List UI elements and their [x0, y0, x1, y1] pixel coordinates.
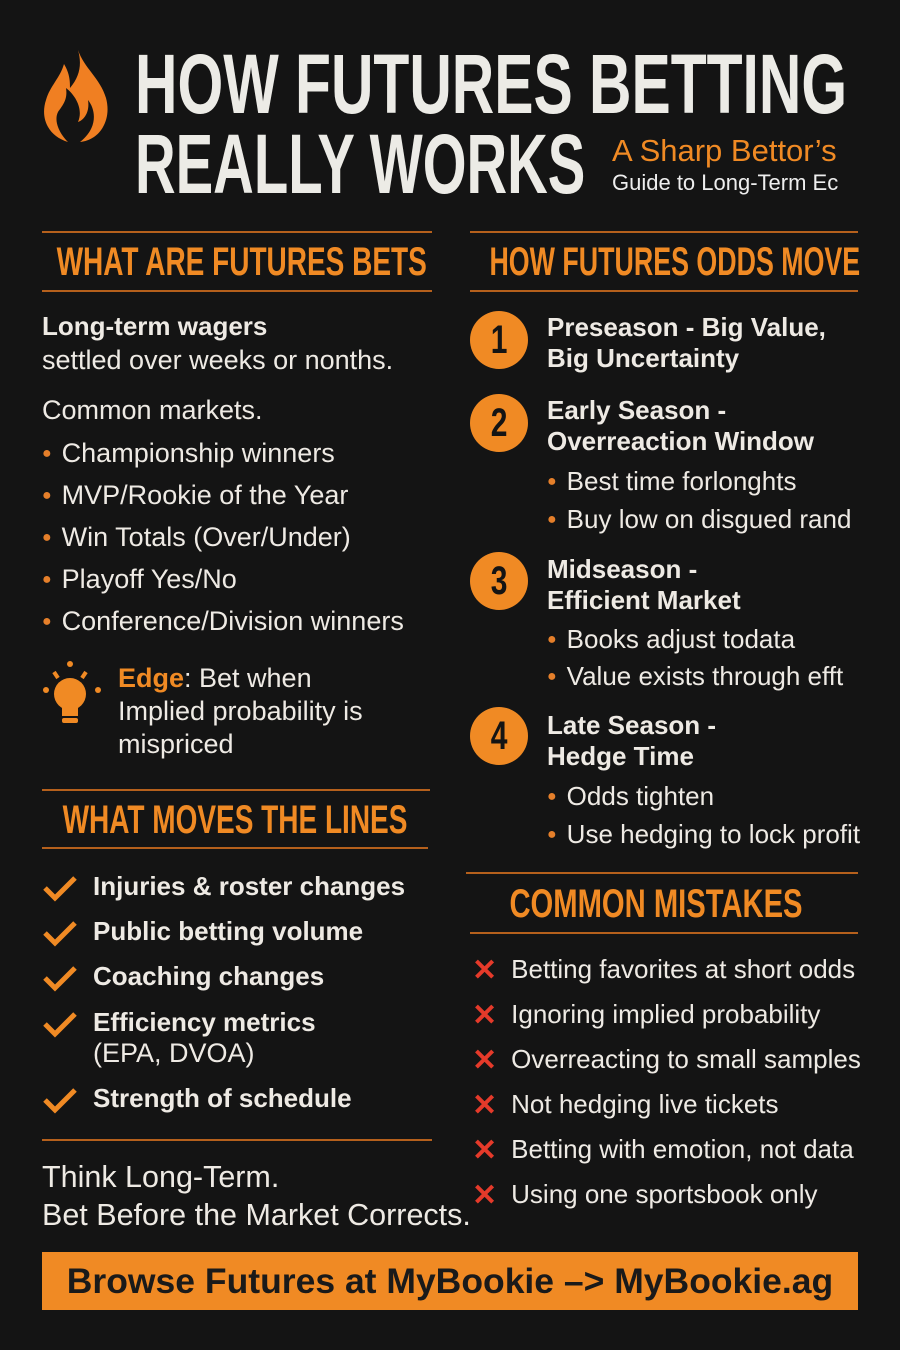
panel: odds stages: Overreaction Window	[547, 426, 814, 456]
subtitle: A Sharp Bettor’s	[612, 133, 837, 168]
list: common mistakes: ✕ Overreacting to small samples	[472, 1044, 861, 1077]
panel: odds stages: ● Buy low on disgued rand	[547, 504, 851, 534]
panel: odds stages: 2	[491, 401, 507, 445]
panel: odds stages: Late Season -	[547, 710, 716, 740]
callout: edge: mispriced	[118, 729, 234, 759]
title	[135, 37, 847, 211]
panel: odds stages: Midseason -	[547, 554, 697, 584]
tagline: Bet Before the Market Corrects.	[42, 1198, 471, 1232]
heading: what are futures bets: WHAT ARE FUTURES BETS	[57, 240, 427, 284]
panel: what are futures bets: ● Playoff Yes/No	[42, 564, 237, 594]
panel: odds stages: Hedge Time	[547, 741, 694, 771]
title: HOW FUTURES BETTING	[135, 37, 847, 131]
callout: edge: Implied probability is	[118, 696, 363, 726]
tagline: Think Long-Term.	[42, 1160, 279, 1194]
cta banner: Browse Futures at MyBookie –> MyBookie.ag	[67, 1261, 833, 1301]
list: common mistakes: ✕ Not hedging live tickets	[472, 1089, 779, 1122]
list: common mistakes: ✕ Betting favorites at short odds	[472, 954, 855, 987]
callout: edge: Edge: Bet when	[118, 663, 312, 693]
icon: lightbulb	[43, 661, 101, 723]
subtitle	[612, 133, 838, 195]
panel: odds stages: ● Use hedging to lock profit	[547, 819, 860, 849]
list: what moves the lines: (EPA, DVOA)	[93, 1038, 255, 1068]
list: what moves the lines: Strength of schedule	[93, 1083, 352, 1113]
list: what moves the lines	[43, 871, 405, 1114]
panel: odds stages: ● Best time forlonghts	[547, 466, 796, 496]
cta banner	[42, 1252, 858, 1310]
panel: odds stages: 3	[491, 559, 507, 603]
list: what moves the lines: Injuries & roster changes	[93, 871, 405, 901]
list: common mistakes	[472, 954, 861, 1212]
icon: flame	[44, 50, 108, 142]
list: what moves the lines: Efficiency metrics	[93, 1007, 316, 1037]
panel: odds stages: ● Books adjust todata	[547, 624, 795, 654]
title: REALLY WORKS	[135, 117, 585, 211]
panel: what are futures bets: ● Win Totals (Over/Under)	[42, 522, 351, 552]
callout: edge	[118, 663, 363, 759]
subtitle: Guide to Long-Term Ec	[612, 170, 838, 195]
panel: odds stages: Efficient Market	[547, 585, 741, 615]
panel: what are futures bets: ● Conference/Division winners	[42, 606, 404, 636]
tagline	[42, 1160, 471, 1232]
panel: odds stages: Big Uncertainty	[547, 343, 739, 373]
list: common mistakes: ✕ Using one sportsbook only	[472, 1179, 818, 1212]
panel: odds stages: 1	[491, 318, 507, 362]
panel: what are futures bets: settled over weeks or nonths.	[42, 345, 393, 375]
panel: odds stages: Preseason - Big Value,	[547, 312, 826, 342]
heading: common mistakes: COMMON MISTAKES	[509, 882, 803, 926]
heading: what moves the lines: WHAT MOVES THE LINES	[63, 798, 407, 842]
list: common mistakes: ✕ Ignoring implied probability	[472, 999, 820, 1032]
panel: what are futures bets: Long-term wagers	[42, 311, 267, 341]
heading: how futures odds move: HOW FUTURES ODDS MOVE	[489, 240, 860, 284]
panel: what are futures bets: ● Championship winners	[42, 438, 335, 468]
list: what moves the lines: Public betting volume	[93, 916, 363, 946]
panel: odds stages: 4	[491, 714, 507, 758]
panel: what are futures bets	[42, 311, 404, 759]
list: common mistakes: ✕ Betting with emotion, not data	[472, 1134, 854, 1167]
panel: odds stages: Early Season -	[547, 395, 726, 425]
panel: what are futures bets: Common markets.	[42, 395, 263, 425]
panel: odds stages	[470, 311, 860, 849]
panel: what are futures bets: ● MVP/Rookie of the Year	[42, 480, 348, 510]
panel: odds stages: ● Value exists through efft	[547, 661, 843, 691]
panel: odds stages: ● Odds tighten	[547, 781, 714, 811]
list: what moves the lines: Coaching changes	[93, 961, 324, 991]
